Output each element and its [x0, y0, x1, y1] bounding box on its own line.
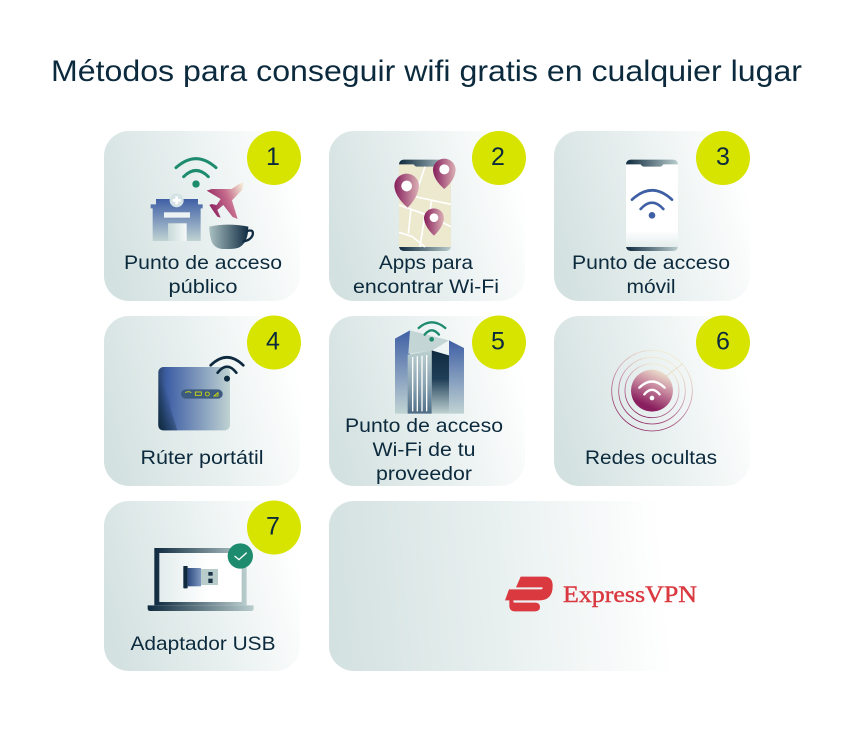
logo: ExpressVPN mark	[505, 577, 553, 611]
label	[353, 252, 499, 298]
badge 6	[696, 316, 750, 370]
badge 7	[247, 500, 301, 554]
label: Redes ocultas	[585, 447, 717, 469]
icon: provider buildings	[395, 322, 464, 414]
panel: 7 Adaptador USB	[104, 500, 301, 671]
label: público	[168, 276, 238, 298]
panel: 2 Apps para encontrar Wi-Fi	[329, 131, 526, 301]
label: encontrar Wi-Fi	[353, 276, 499, 298]
badge 4	[247, 316, 301, 370]
icon: phone with wifi	[626, 160, 678, 251]
icon: phone map with pins	[394, 159, 456, 251]
label: Punto de acceso	[124, 252, 282, 274]
icon: public hotspot	[151, 159, 253, 249]
label: proveedor	[376, 463, 473, 485]
badge 5: 5	[491, 328, 505, 356]
badge 3: 3	[716, 143, 730, 171]
badge 2: 2	[491, 143, 505, 171]
badge 7: 7	[266, 512, 280, 540]
badge 1: 1	[266, 143, 280, 171]
panel: 6 Redes ocultas	[554, 316, 750, 486]
badge 4: 4	[266, 328, 280, 356]
badge 2	[472, 131, 526, 185]
label	[345, 415, 503, 485]
label	[572, 252, 730, 298]
icon: hidden network radar	[612, 350, 692, 431]
badge 3	[696, 131, 750, 185]
title: Métodos para conseguir wifi gratis en cualquier lugar	[51, 55, 802, 88]
badge 5	[472, 316, 526, 370]
label: Adaptador USB	[130, 633, 276, 655]
label: Wi-Fi de tu	[372, 439, 476, 461]
panel: ExpressVPN logo card	[329, 501, 750, 671]
label: Apps para	[379, 252, 473, 274]
panel: 4 Rúter portátil	[104, 316, 301, 486]
icon: laptop with USB adapter	[148, 543, 254, 611]
badge 6: 6	[716, 328, 730, 356]
panel: 3 Punto de acceso móvil	[554, 131, 750, 301]
panel: 1 Punto de acceso público	[104, 131, 301, 301]
label: Punto de acceso	[572, 252, 730, 274]
label: móvil	[626, 276, 676, 298]
badge 1	[247, 131, 301, 185]
panel: 5 Punto de acceso Wi-Fi de tu proveedor	[329, 316, 526, 486]
label: Punto de acceso	[345, 415, 503, 437]
icon: portable router	[158, 357, 243, 430]
label: Rúter portátil	[140, 447, 264, 469]
logo: ExpressVPN wordmark: ExpressVPN	[563, 582, 697, 607]
label	[124, 252, 282, 298]
